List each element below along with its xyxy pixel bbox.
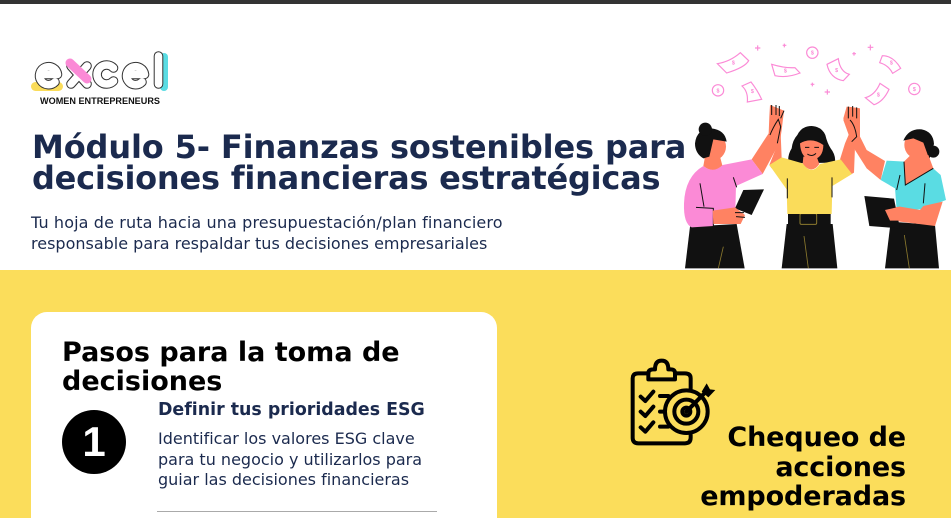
illustration: flying money and three women high-fiving: $	[732, 61, 735, 67]
step description: Identificar los valores ESG clave	[158, 429, 415, 448]
icon: clipboard with target	[630, 358, 716, 446]
title: decisiones financieras estratégicas	[32, 159, 660, 197]
top bar	[0, 0, 951, 4]
title: Módulo 5- Finanzas sostenibles para	[32, 128, 686, 166]
illustration: flying money and three women high-fiving: $	[877, 93, 880, 99]
arrow fletching	[702, 383, 715, 397]
woman centre	[769, 107, 859, 268]
illustration: flying money and three women high-fiving: $	[751, 89, 754, 95]
step description: para tu negocio y utilizarlos para	[158, 450, 422, 468]
illustration: flying money and three women high-fiving: $	[784, 69, 787, 75]
heading: empowered actions checklist: acciones	[775, 452, 906, 482]
step number 1: 1	[82, 418, 106, 465]
icon: flying money	[712, 44, 920, 105]
heading: steps: Pasos para la toma de	[62, 337, 400, 368]
logo: excel women entrepreneurs	[31, 51, 168, 106]
step number 1	[62, 410, 126, 474]
heading: empowered actions checklist: Chequeo de	[727, 422, 906, 453]
woman right	[843, 106, 946, 268]
yellow background section	[0, 270, 951, 518]
illustration: flying money and three women high-fiving: $	[717, 88, 720, 94]
step description	[158, 429, 422, 489]
logo: excel women entrepreneurs: WOMEN ENTREPRENEURS	[40, 96, 160, 106]
heading: steps	[62, 337, 400, 397]
illustration: flying money and three women high-fiving: $	[811, 51, 814, 57]
illustration: flying money and three women high-fiving	[684, 44, 946, 268]
subtitle: responsable para respaldar tus decisiones empresariales	[31, 234, 487, 253]
illustration: flying money and three women high-fiving: $	[913, 87, 916, 93]
heading: empowered actions checklist: empoderadas	[700, 481, 906, 512]
woman left	[684, 105, 784, 268]
title	[32, 128, 686, 197]
subtitle	[30, 213, 503, 253]
illustration: flying money and three women high-fiving: $	[890, 60, 893, 66]
divider	[157, 511, 437, 512]
illustration: flying money and three women high-fiving: $	[835, 68, 838, 74]
subtitle: Tu hoja de ruta hacia una presupuestación/plan financiero	[31, 213, 503, 232]
heading: steps: decisiones	[62, 366, 222, 397]
panel: decision steps	[31, 312, 497, 518]
step heading: Definir tus prioridades ESG	[158, 400, 425, 420]
heading: empowered actions checklist	[700, 422, 906, 512]
step description: guiar las decisiones financieras	[158, 470, 409, 489]
